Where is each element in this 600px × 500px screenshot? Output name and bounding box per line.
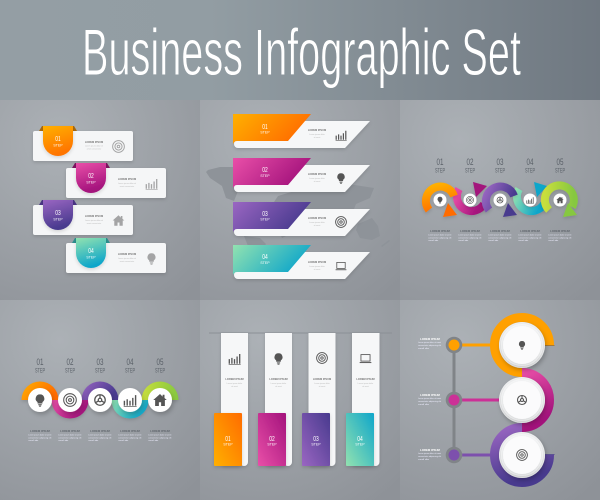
node row 01 [418, 337, 494, 353]
ring 02 [457, 182, 487, 211]
tab 04 [346, 333, 380, 466]
captions: Lorem ipsum dolor sit amet [88, 434, 112, 436]
step labels: 03 [496, 157, 504, 168]
card 04: Lorem ipsum dolor sit [118, 257, 137, 260]
step labels: 03 [96, 357, 104, 368]
ribbon 02: STEP [260, 174, 270, 178]
tab 02: Lorem ipsum dolor [271, 382, 287, 385]
captions: LOREM IPSUM [550, 229, 571, 233]
captions: sed do [548, 240, 560, 242]
step labels: STEP [465, 168, 475, 174]
step labels: STEP [555, 168, 565, 174]
ribbon 02: sit amet [314, 180, 321, 183]
step labels [435, 157, 565, 174]
node row 02: sed do [418, 404, 430, 406]
card 02: LOREM IPSUM [118, 177, 136, 181]
captions: Lorem ipsum dolor sit amet [28, 434, 52, 436]
step labels: 02 [66, 357, 74, 368]
node row 02 [418, 392, 500, 408]
step labels: STEP [155, 368, 165, 374]
step labels: 05 [556, 157, 564, 168]
step labels: 04 [126, 357, 134, 368]
panel: wave timeline [0, 300, 200, 500]
node row 03: consectetur adipiscing elit [418, 455, 441, 458]
tab 04: STEP [355, 442, 365, 446]
node row 03: sed do [418, 459, 430, 461]
card 04: 04 [88, 248, 94, 255]
captions: Lorem ipsum dolor sit amet [488, 234, 512, 236]
centre icons [434, 194, 566, 206]
node row 02: LOREM IPSUM [420, 393, 441, 397]
ribbon 04: sit amet [314, 268, 321, 271]
card 02: 02 [88, 173, 94, 180]
tab 03: 03 [313, 436, 319, 443]
captions: LOREM IPSUM [520, 229, 541, 233]
card 02 [66, 163, 166, 198]
captions: LOREM IPSUM [460, 229, 481, 233]
node row 01: consectetur adipiscing elit [418, 344, 441, 347]
step labels: STEP [435, 168, 445, 174]
captions: sed do [28, 440, 40, 442]
captions: consectetur adipiscing elit [118, 436, 142, 440]
captions: sed do [118, 440, 130, 442]
ring 05 [545, 185, 577, 217]
captions: LOREM IPSUM [120, 429, 141, 433]
node row 03: LOREM IPSUM [420, 448, 441, 452]
ring 01 [426, 187, 457, 217]
captions: consectetur adipiscing elit [148, 436, 172, 440]
captions: consectetur adipiscing elit [548, 236, 572, 240]
ribbon 04 [233, 245, 370, 279]
wave arcs [22, 382, 178, 418]
panel: vertical tabs [200, 300, 400, 500]
ribbon 04: LOREM IPSUM [308, 260, 326, 264]
card 02: amet consectetur [120, 185, 135, 188]
captions: consectetur adipiscing elit [58, 436, 82, 440]
step labels: 01 [36, 357, 44, 368]
node row 03 [418, 447, 494, 463]
node row 01: Lorem ipsum dolor sit amet [418, 341, 441, 344]
card 03: STEP [53, 218, 63, 222]
card 01 [33, 126, 133, 161]
captions: LOREM IPSUM [60, 429, 81, 433]
ribbon 04: 04 [262, 254, 268, 261]
node row 02: Lorem ipsum dolor sit amet [418, 397, 441, 400]
ribbon 04: Lorem ipsum dolor [309, 265, 325, 268]
ribbon 02: Lorem ipsum dolor [309, 177, 325, 180]
tab 01 [214, 333, 248, 466]
captions: Lorem ipsum dolor sit amet [518, 234, 542, 236]
captions: consectetur adipiscing elit [518, 236, 542, 240]
captions [428, 229, 572, 242]
disc 03 [499, 432, 545, 478]
captions: Lorem ipsum dolor sit amet [458, 234, 482, 236]
pink arc [522, 372, 550, 428]
step labels: STEP [35, 368, 45, 374]
captions: consectetur adipiscing elit [428, 236, 452, 240]
tab 03: STEP [311, 442, 321, 446]
ribbon 03: sit amet [314, 224, 321, 227]
ribbon 01: LOREM IPSUM [308, 128, 326, 132]
disc 01 [499, 322, 545, 368]
world map [206, 167, 390, 256]
captions: consectetur adipiscing elit [88, 436, 112, 440]
ribbon 02 [233, 158, 370, 192]
tab 02 [258, 333, 292, 466]
captions: sed do [458, 240, 470, 242]
background: title band [0, 0, 600, 100]
node row 01: LOREM IPSUM [420, 337, 441, 341]
tab 01: STEP [223, 442, 233, 446]
tab 04: Lorem ipsum dolor [358, 382, 374, 385]
captions: LOREM IPSUM [430, 229, 451, 233]
tab 03: LOREM IPSUM [313, 377, 331, 381]
captions: LOREM IPSUM [90, 429, 111, 433]
tab 02: STEP [267, 442, 277, 446]
ring 03 [486, 187, 517, 217]
card 03 [33, 200, 133, 235]
captions: consectetur adipiscing elit [458, 236, 482, 240]
captions: consectetur adipiscing elit [488, 236, 512, 240]
ribbon 03: STEP [260, 218, 270, 222]
card 01: STEP [53, 144, 63, 148]
captions: sed do [58, 440, 70, 442]
tab 03: Lorem ipsum dolor [314, 382, 330, 385]
ring 04 [517, 182, 547, 211]
tab 02: LOREM IPSUM [269, 377, 288, 381]
card 03: amet consectetur [87, 222, 102, 225]
captions: sed do [88, 440, 100, 442]
captions: LOREM IPSUM [150, 429, 171, 433]
captions: sed do [428, 240, 440, 242]
tab 04: 04 [357, 436, 363, 443]
captions: consectetur adipiscing elit [28, 436, 52, 440]
captions: sed do [518, 240, 530, 242]
card 01: amet consectetur [87, 148, 102, 150]
step labels: 02 [466, 157, 474, 168]
ribbon 01: 01 [262, 124, 268, 131]
panel: arrow ring steps [400, 100, 600, 300]
ribbon 01: sit amet [314, 136, 321, 139]
card 02: STEP [86, 180, 96, 184]
step labels: STEP [95, 368, 105, 374]
card 01: 01 [55, 136, 61, 143]
icon discs [28, 388, 172, 412]
card 04 [66, 238, 166, 273]
tab 04: LOREM IPSUM [356, 377, 375, 381]
captions: Lorem ipsum dolor sit amet [118, 434, 142, 436]
step labels: STEP [65, 368, 75, 374]
card 01: LOREM IPSUM [85, 140, 103, 144]
panel: step cards with shields [0, 100, 200, 300]
step labels: 05 [156, 357, 164, 368]
ribbon 03: LOREM IPSUM [308, 216, 326, 220]
panel: stacked discs timeline [400, 300, 600, 500]
tab 01: 01 [225, 436, 231, 443]
card 04: STEP [86, 256, 96, 260]
tab 01: sit amet [231, 385, 238, 388]
ribbon 01: Lorem ipsum dolor [309, 133, 325, 136]
step labels: STEP [495, 168, 505, 174]
purple arc [494, 428, 555, 482]
card 03: Lorem ipsum dolor sit [85, 219, 104, 222]
step labels: 04 [526, 157, 534, 168]
tab 03 [302, 333, 336, 466]
tab 04: sit amet [362, 385, 369, 388]
captions: Lorem ipsum dolor sit amet [58, 434, 82, 436]
ribbon 02: 02 [262, 167, 268, 174]
captions: Lorem ipsum dolor sit amet [148, 434, 172, 436]
card 03: LOREM IPSUM [85, 214, 103, 218]
tab 02: sit amet [275, 385, 282, 388]
tab 03: sit amet [319, 385, 326, 388]
ribbon 01 [233, 114, 370, 148]
node row 02: consectetur adipiscing elit [418, 400, 441, 403]
captions: sed do [488, 240, 500, 242]
step labels [35, 357, 165, 374]
card 04: amet consectetur [120, 260, 135, 263]
node row 03: Lorem ipsum dolor sit amet [418, 452, 441, 455]
node row 01: sed do [418, 348, 430, 350]
step labels: STEP [525, 168, 535, 174]
step labels: 01 [436, 157, 444, 168]
orange arc [494, 318, 555, 372]
captions: sed do [148, 440, 160, 442]
card 02: Lorem ipsum dolor sit [118, 182, 137, 185]
ribbon 01: STEP [260, 130, 270, 134]
ribbon 03 [233, 202, 370, 236]
card 04: LOREM IPSUM [118, 252, 136, 256]
step labels: STEP [125, 368, 135, 374]
captions [28, 429, 172, 442]
tab 01: LOREM IPSUM [225, 377, 244, 381]
tab 01: Lorem ipsum dolor [227, 382, 243, 385]
disc 02 [499, 377, 545, 423]
ribbon 03: 03 [262, 211, 268, 218]
captions: LOREM IPSUM [30, 429, 51, 433]
panel: ribbons over world map [200, 100, 400, 300]
connector spine [452, 345, 456, 455]
card 01: Lorem ipsum dolor sit [85, 144, 104, 148]
captions: LOREM IPSUM [490, 229, 511, 233]
tab 02: 02 [269, 436, 275, 443]
ribbon 04: STEP [260, 261, 270, 265]
ribbon 02: LOREM IPSUM [308, 172, 326, 176]
ribbon 03: Lorem ipsum dolor [309, 221, 325, 224]
card 03: 03 [55, 210, 61, 217]
captions: Lorem ipsum dolor sit amet [548, 234, 572, 236]
captions: Lorem ipsum dolor sit amet [428, 234, 452, 236]
